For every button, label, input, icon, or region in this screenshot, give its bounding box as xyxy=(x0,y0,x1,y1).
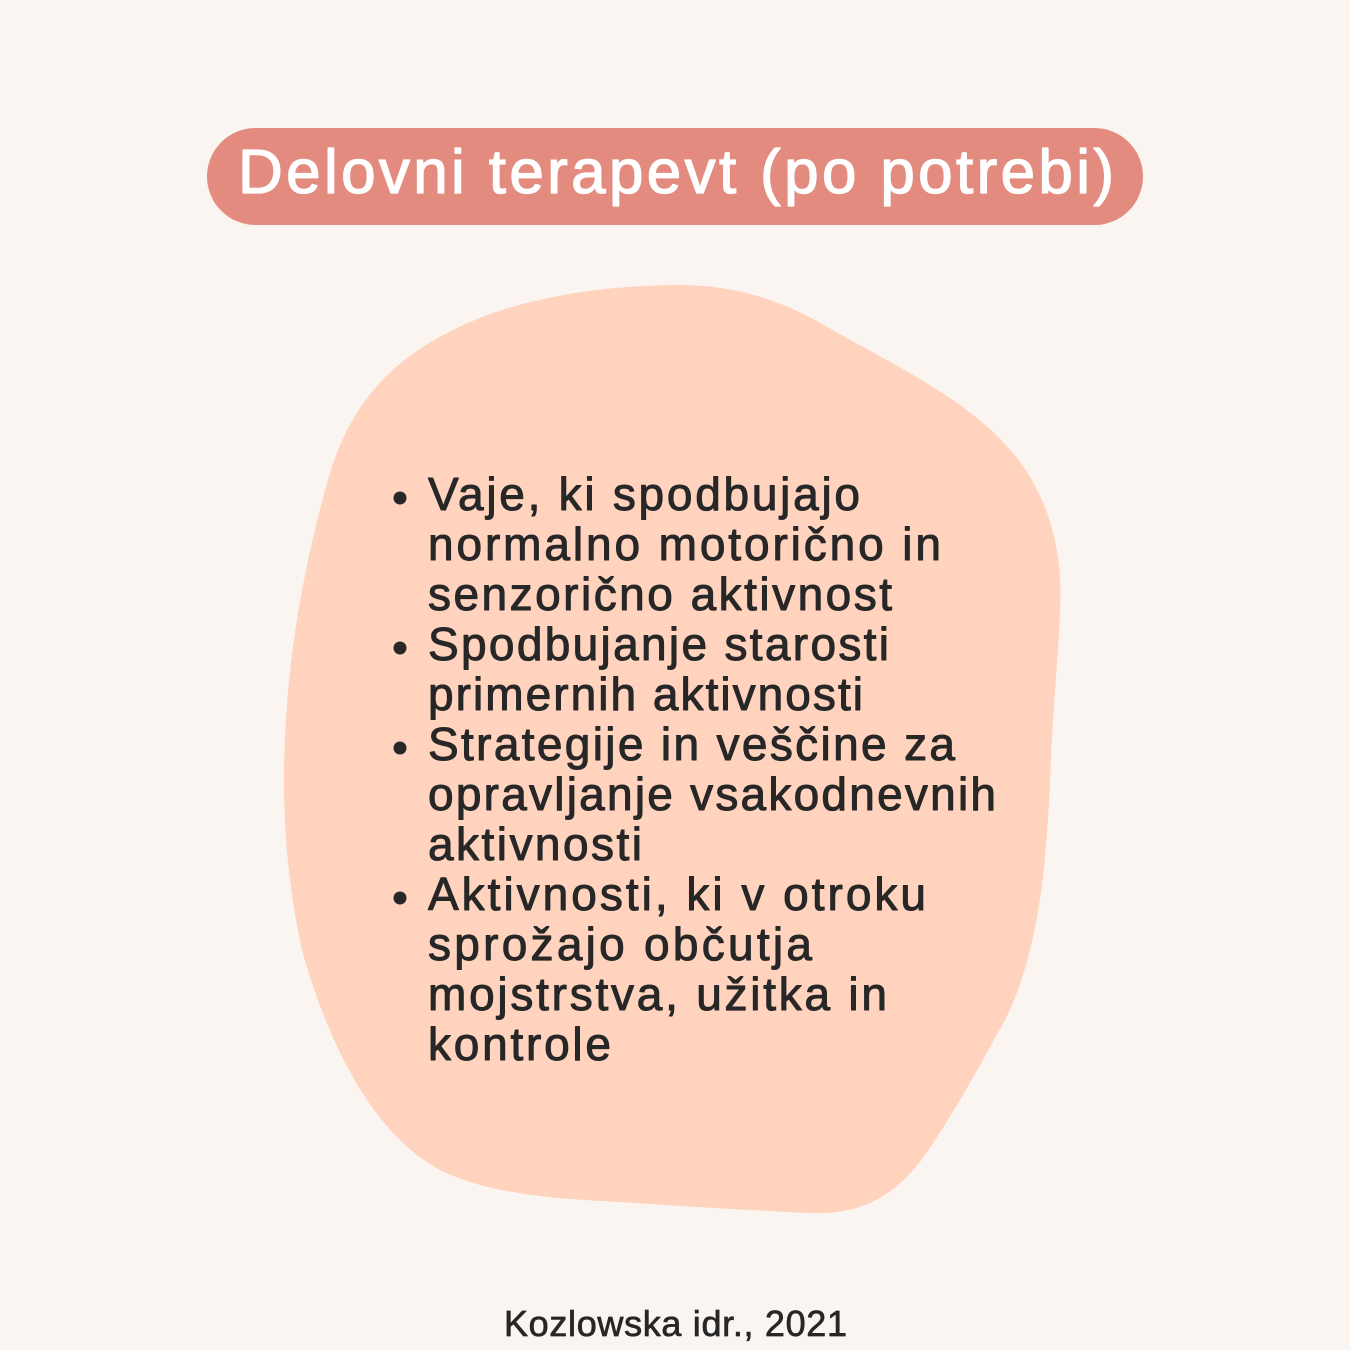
bullet list xyxy=(394,468,996,1070)
bullet item 2: primernih aktivnosti xyxy=(428,668,863,720)
peach blob panel xyxy=(284,285,1060,1213)
bullet item 3: opravljanje vsakodnevnih xyxy=(428,768,996,820)
bullet item 4: kontrole xyxy=(428,1018,611,1070)
bullet item 2: Spodbujanje starosti xyxy=(428,618,889,670)
title banner: Delovni terapevt (po potrebi) xyxy=(238,138,1114,207)
bullet item 1 xyxy=(394,468,941,620)
bullet item 4: sprožajo občutja xyxy=(428,918,812,970)
bullet item 3: Strategije in veščine za xyxy=(428,718,955,770)
title banner xyxy=(207,128,1143,225)
bullet item 1: normalno motorično in xyxy=(428,518,941,570)
bullet item 1: senzorično aktivnost xyxy=(428,568,892,620)
bullet item 3 xyxy=(394,718,996,870)
bullet item 4 xyxy=(394,868,926,1070)
bullet item 1: Vaje, ki spodbujajo xyxy=(428,468,860,520)
bullet item 4: Aktivnosti, ki v otroku xyxy=(428,868,926,920)
bullet item 2 xyxy=(394,618,889,720)
bullet item 4: mojstrstva, užitka in xyxy=(428,968,887,1020)
source citation: Kozlowska idr., 2021 xyxy=(504,1303,847,1344)
bullet item 3: aktivnosti xyxy=(428,818,642,870)
